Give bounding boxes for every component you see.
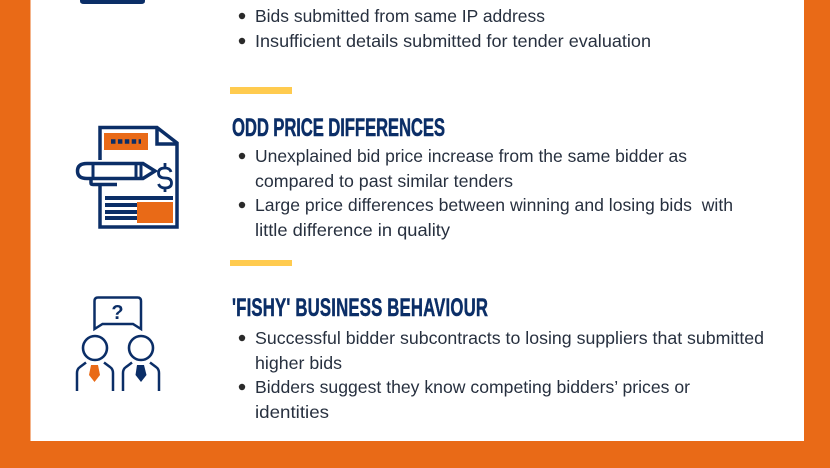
bullet list: odd price differences: Unexplained bid price increase from the same bidder as [255, 146, 687, 166]
bullet list: fishy business behaviour: higher bids [255, 353, 342, 373]
bullet list: fishy business behaviour: Bidders suggest they know competing bidders’ prices or [255, 377, 690, 397]
bullet list: odd price differences [239, 146, 733, 240]
bullet list: odd price differences: Large price differences between winning and losing bids with [255, 195, 733, 215]
icon: dollar sign [158, 163, 172, 192]
divider bar: odd price section [230, 87, 292, 94]
bullet list: top section: Insufficient details submitted for tender evaluation [255, 31, 651, 51]
bullet list: odd price differences: compared to past similar tenders [255, 171, 513, 191]
bullet list: top section [239, 6, 651, 51]
bullet list: top section: Bids submitted from same IP address [255, 6, 545, 26]
bullet list: fishy business behaviour: Successful bidder subcontracts to losing suppliers that submitted [255, 328, 764, 348]
icon: cropped top icon [80, 0, 145, 4]
heading: fishy business behaviour: 'FISHY' BUSINESS BEHAVIOUR [232, 294, 488, 322]
bullet list: fishy business behaviour [239, 328, 764, 422]
bullet list: fishy business behaviour: identities [255, 402, 329, 422]
heading: odd price differences: ODD PRICE DIFFERENCES [232, 114, 445, 142]
divider bar: fishy section [230, 260, 292, 266]
icon: price document with pencil [78, 128, 177, 227]
icon: two people with question bubble [77, 298, 159, 391]
icon: two people with question bubble: ? [111, 302, 124, 324]
bullet list: odd price differences: little difference in quality [255, 220, 450, 240]
